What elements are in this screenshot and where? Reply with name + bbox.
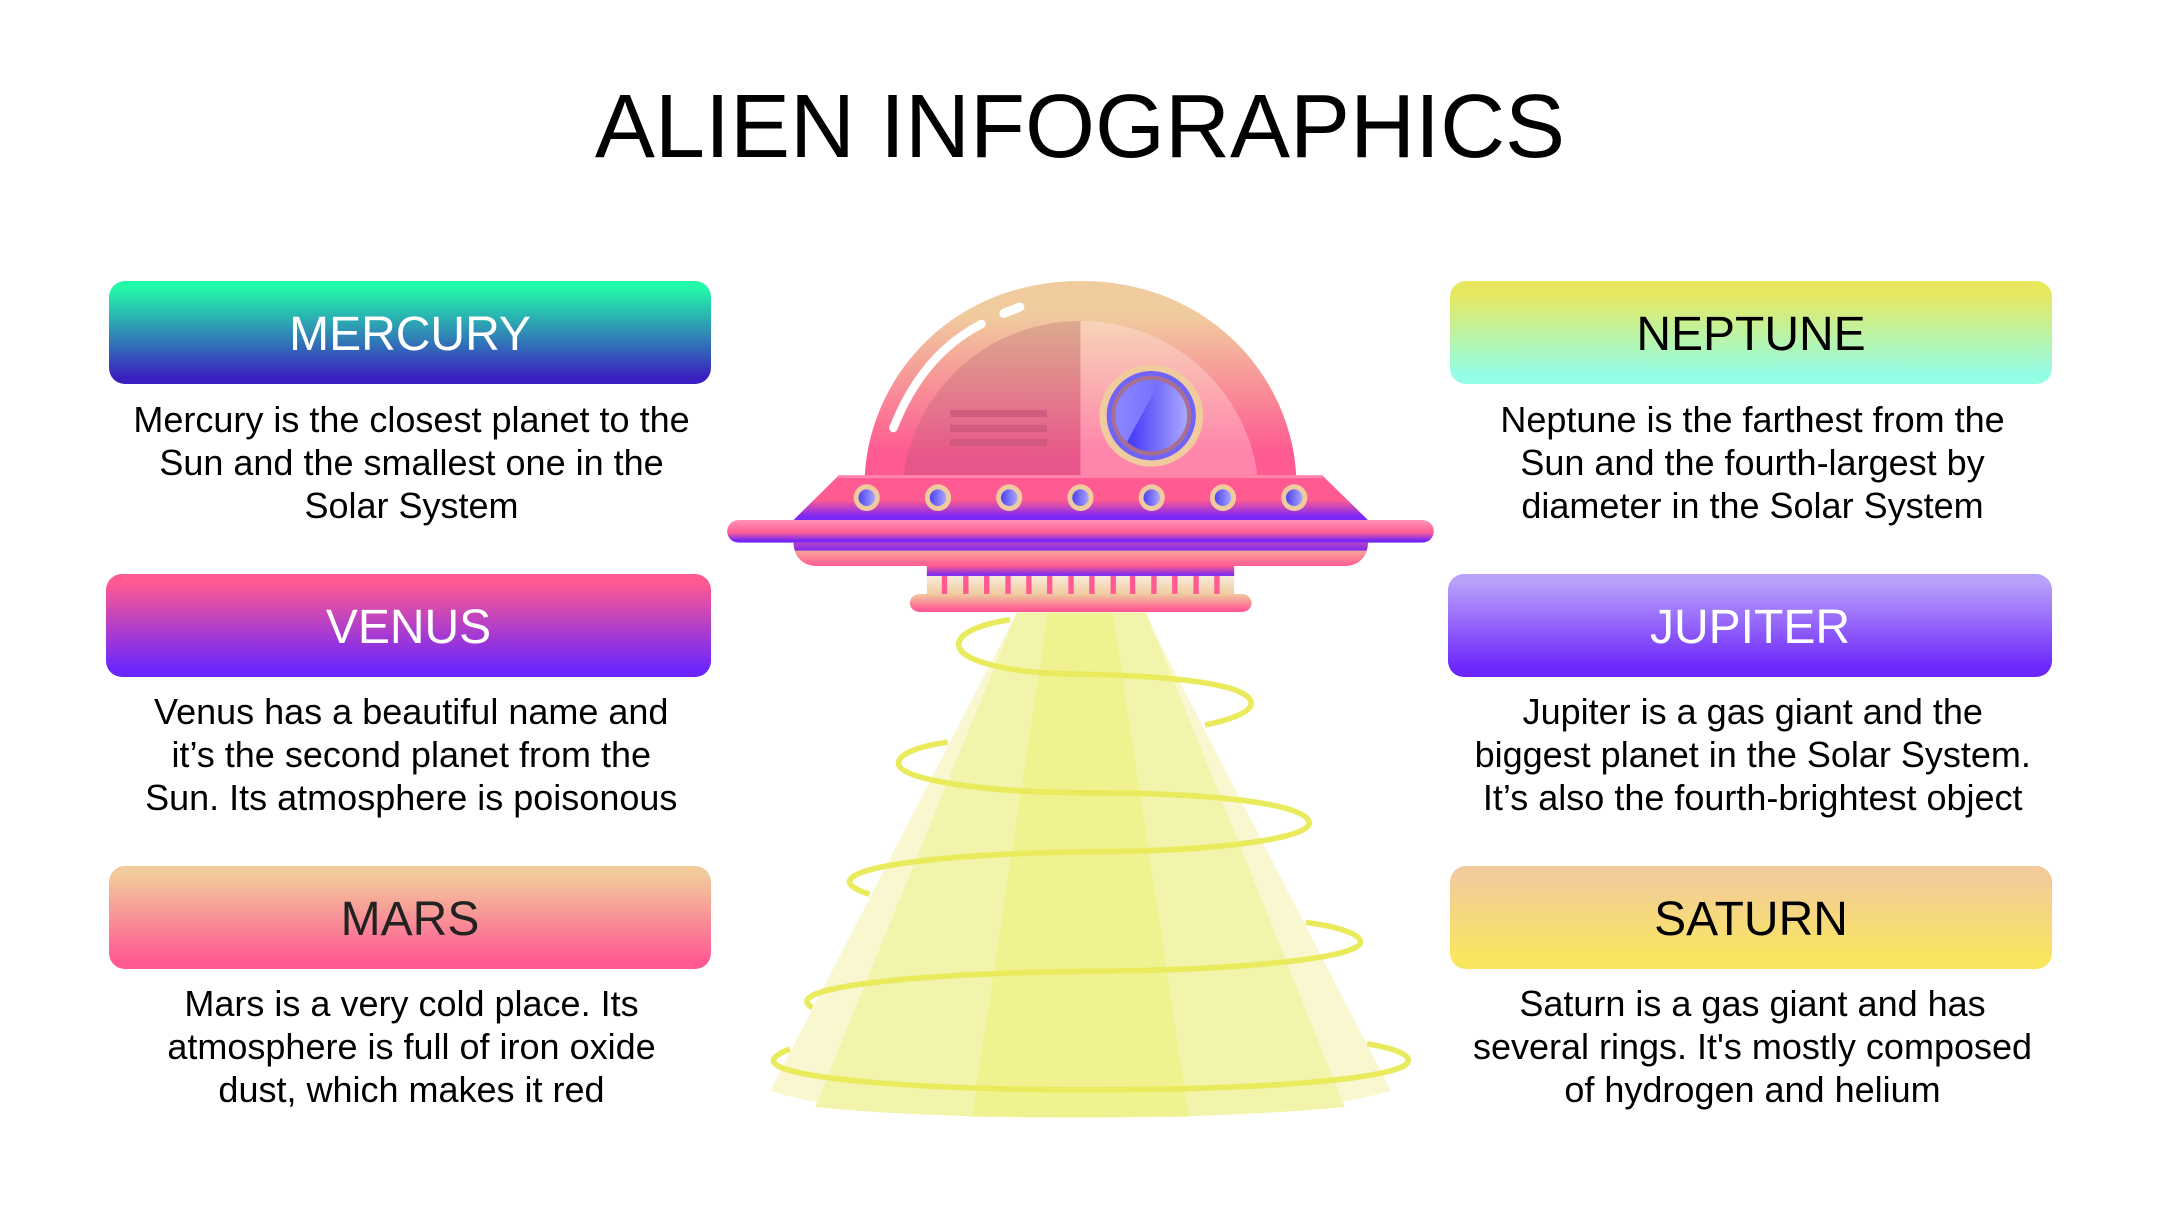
panel: mercury [109,281,711,526]
neck [927,566,1234,576]
saucer ring [727,520,1434,543]
text: neptune description [1500,399,2005,526]
heading: saturn [1450,866,2052,969]
portholes [854,484,1307,511]
text: mercury description: Sun and the smallest one in the [159,442,664,483]
dome [865,281,1296,476]
heading: mercury: MERCURY [289,308,531,361]
lower hull [794,543,1368,566]
heading: venus: VENUS [326,601,491,654]
text: neptune description: Neptune is the farthest from the [1500,399,2005,440]
text: venus description: Sun. Its atmosphere is poisonous [145,777,677,818]
heading: jupiter [1448,574,2052,677]
panel: neptune [1450,281,2052,526]
text: mars description: Mars is a very cold place. Its [184,983,639,1024]
panel: jupiter [1448,574,2052,818]
heading: mars: MARS [341,893,479,946]
panel: venus [106,574,711,818]
base plate [910,594,1252,612]
text: jupiter description: Jupiter is a gas giant and the [1523,691,1983,732]
heading: venus [106,574,711,677]
text: venus description [145,691,677,818]
text: mercury description: Mercury is the closest planet to the [133,399,690,440]
text: saturn description: Saturn is a gas giant and has [1519,983,1986,1024]
panel: saturn [1450,866,2052,1110]
text: mercury description [133,399,690,526]
heading: saturn: SATURN [1654,893,1848,946]
panel: mars [109,866,711,1110]
text: venus description: Venus has a beautiful name and [154,691,668,732]
text: saturn description: of hydrogen and helium [1564,1069,1941,1110]
text: saturn description: several rings. It's mostly composed [1473,1026,2032,1067]
text: mercury description: Solar System [304,485,519,526]
text: saturn description [1473,983,2032,1110]
heading: neptune: NEPTUNE [1636,308,1866,361]
text: mars description: dust, which makes it red [218,1069,605,1110]
ufo spaceship [727,281,1434,612]
main window [1099,365,1203,467]
text: neptune description: diameter in the Solar System [1521,485,1984,526]
text: neptune description: Sun and the fourth-largest by [1520,442,1985,483]
light beam with coil [770,612,1408,1118]
heading: mercury [109,281,711,384]
heading: neptune [1450,281,2052,384]
text: jupiter description: biggest planet in the Solar System. [1475,734,2031,775]
upper band [794,476,1368,520]
heading: jupiter: JUPITER [1650,601,1850,654]
title: ALIEN INFOGRAPHICS [595,77,1565,177]
text: venus description: it’s the second planet from the [171,734,651,775]
text: jupiter description [1475,691,2031,818]
text: jupiter description: It’s also the fourth-brightest object [1483,777,2023,818]
ribbed landing section [927,576,1234,595]
text: mars description: atmosphere is full of iron oxide [167,1026,656,1067]
heading: mars [109,866,711,969]
text: mars description [167,983,656,1110]
